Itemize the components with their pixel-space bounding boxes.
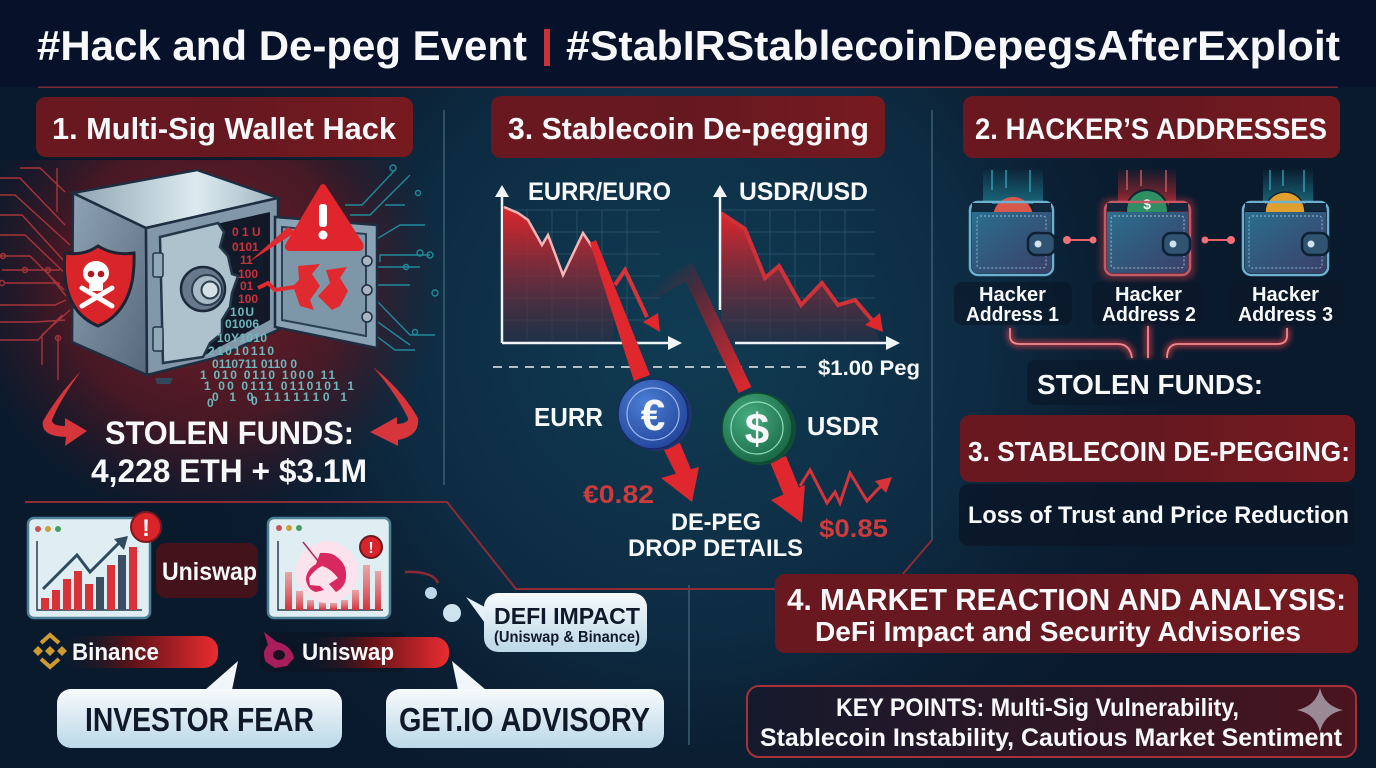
- price labels: $0.85: [819, 515, 888, 543]
- arrow: right curve: [370, 367, 418, 446]
- binary data leak: 0110711 0110 0: [212, 357, 297, 371]
- coin labels: [534, 404, 879, 441]
- hacker address labels: [954, 282, 1344, 326]
- chart: USDR/USD: USDR/USD: [739, 178, 868, 206]
- de-peg drop details: [628, 509, 803, 562]
- icon: broken safe: [72, 170, 377, 410]
- binance pill: Binance: [72, 639, 159, 666]
- squiggle arrow: [800, 470, 892, 503]
- binary data leak: 1 00 0111 0110101 1: [204, 379, 354, 393]
- panel: hacker addresses: [954, 96, 1355, 546]
- panel: multi-sig wallet hack: [0, 97, 438, 489]
- binary data leak: [200, 225, 354, 410]
- callout: get.io advisory: [386, 661, 664, 748]
- binary data leak: 100: [238, 267, 258, 281]
- binary data leak: 0 1 0 1111110 1: [212, 390, 347, 404]
- binary data leak: 1 010 0110 1000 11: [200, 368, 335, 382]
- panel: market charts: [28, 512, 664, 748]
- price labels: [583, 481, 888, 543]
- heading: stablecoin de-pegging: [491, 96, 885, 158]
- panel: key points: KEY POINTS: Multi-Sig Vulnerability,: [836, 694, 1239, 722]
- heading: multi-sig wallet hack: 1. Multi-Sig Wallet Hack: [52, 111, 397, 146]
- callout: defi impact: (Uniswap & Binance): [494, 629, 640, 646]
- wallet 2: $: [1143, 196, 1151, 212]
- heading: stablecoin de-pegging: 3. Stablecoin De-pegging: [508, 111, 869, 146]
- hacker address labels: Address 1: [966, 304, 1059, 326]
- stolen funds text: [91, 415, 367, 489]
- panel: key points: [747, 686, 1356, 757]
- heading: hacker's addresses: 2. HACKER’S ADDRESSES: [975, 113, 1327, 146]
- icon: dollar coin: $: [745, 405, 769, 454]
- chart: USDR/USD: [713, 178, 900, 350]
- binary data leak: 0: [207, 396, 214, 410]
- wallet 3: [1243, 168, 1329, 275]
- panel: market reaction and analysis: [775, 574, 1358, 653]
- heading: multi-sig wallet hack: [36, 97, 413, 157]
- de-peg drop details: DE-PEG: [671, 509, 761, 536]
- peg line: $1.00 Peg: [818, 356, 920, 380]
- thought connector: [405, 572, 461, 622]
- coin labels: USDR: [807, 413, 879, 441]
- heading: hacker's addresses: [963, 96, 1340, 158]
- stolen funds text: STOLEN FUNDS:: [105, 415, 354, 451]
- callout: get.io advisory: GET.IO ADVISORY: [399, 701, 650, 738]
- hacker address labels: Hacker: [979, 284, 1046, 306]
- binary data leak: 10U: [230, 305, 254, 319]
- callout: defi impact: DEFI IMPACT: [494, 603, 640, 629]
- icon: skull shield: [64, 246, 134, 326]
- stolen funds label: [1027, 360, 1275, 405]
- callout: defi impact: [466, 593, 647, 652]
- wallet connectors: [1063, 236, 1235, 244]
- arrow: left curve: [43, 371, 87, 446]
- arrow: USDR drop: [647, 272, 805, 523]
- hacker address labels: Address 3: [1238, 304, 1333, 326]
- chart: EURR/EURO: EURR/EURO: [528, 178, 671, 206]
- icon: warning triangle: [288, 187, 361, 248]
- chart window: rising bars: !: [142, 515, 150, 542]
- stolen funds label: STOLEN FUNDS:: [1037, 369, 1263, 400]
- icon: euro coin: [618, 379, 692, 451]
- panel: market reaction and analysis: DeFi Impact and Security Advisories: [815, 616, 1301, 647]
- icon: euro coin: €: [641, 391, 665, 440]
- uniswap label: Uniswap: [162, 558, 257, 586]
- binary data leak: 10Y1010: [217, 331, 267, 345]
- hacker address labels: Hacker: [1115, 284, 1182, 306]
- binary data leak: 0 1 U: [232, 225, 261, 239]
- de-peg drop details: DROP DETAILS: [628, 535, 803, 562]
- uniswap pill: [260, 632, 449, 672]
- icon: sparkle: [1297, 688, 1343, 732]
- arrow: EURR drop: [590, 240, 699, 502]
- callout: investor fear: [57, 661, 342, 748]
- heading: stablecoin de-pegging summary: [960, 415, 1355, 482]
- price labels: €0.82: [583, 481, 654, 509]
- section dividers: [25, 110, 932, 745]
- binary data leak: 01: [240, 279, 254, 293]
- icon: dollar coin: [722, 393, 796, 465]
- hacker address labels: Address 2: [1102, 304, 1196, 326]
- title: #StabIRStablecoinDepegsAfterExploit: [566, 22, 1340, 69]
- wallet 2: [1100, 168, 1195, 280]
- title: #Hack and De-peg Event: [37, 22, 527, 69]
- circuit traces: [0, 165, 438, 380]
- coin labels: EURR: [534, 404, 603, 432]
- heading: stablecoin de-pegging summary: 3. STABLECOIN DE-PEGGING:: [968, 436, 1350, 467]
- hacker address labels: Hacker: [1252, 284, 1319, 306]
- binary data leak: 0101: [232, 240, 259, 254]
- chart: EURR/EURO: [495, 178, 682, 350]
- binary data leak: 21010110: [208, 344, 274, 358]
- binary data leak: 01006: [225, 317, 259, 331]
- loss of trust text: [959, 484, 1355, 546]
- panel: key points: Stablecoin Instability, Cautious Market Sentiment: [760, 724, 1343, 752]
- stolen funds text: 4,228 ETH + $3.1M: [91, 453, 367, 489]
- funds flow lines: [1010, 326, 1287, 358]
- uniswap pill: Uniswap: [302, 639, 394, 666]
- title: [37, 22, 1340, 69]
- wallet 1: [970, 168, 1055, 275]
- binary data leak: 100: [238, 292, 258, 306]
- loss of trust text: Loss of Trust and Price Reduction: [968, 502, 1349, 529]
- binance pill: [33, 635, 218, 668]
- callout: investor fear: INVESTOR FEAR: [85, 701, 314, 738]
- binary data leak: 0: [251, 394, 258, 408]
- panel: market reaction and analysis: 4. MARKET REACTION AND ANALYSIS:: [787, 582, 1346, 617]
- binary data leak: 11: [240, 253, 253, 267]
- chart window: uniswap: [268, 518, 390, 618]
- chart window: rising bars: [28, 512, 161, 618]
- chart window: uniswap: !: [368, 540, 374, 557]
- uniswap label: [156, 543, 258, 598]
- panel: stablecoin de-pegging: [491, 96, 920, 562]
